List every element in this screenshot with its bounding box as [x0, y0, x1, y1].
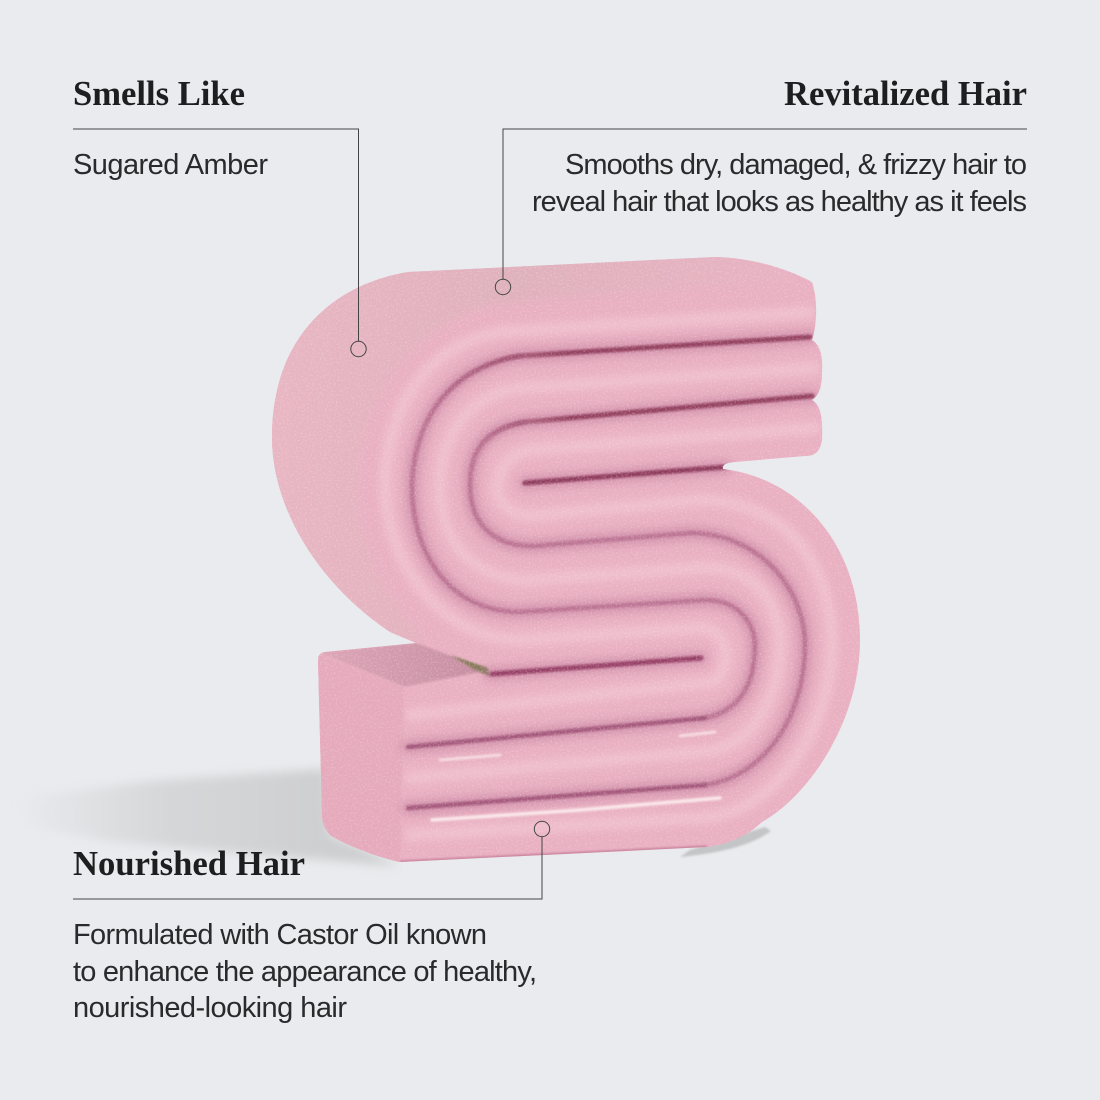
- leader line: [73, 129, 358, 341]
- callout: Revitalized Hair: [495, 74, 1027, 295]
- body text: Formulated with Castor Oil known: [73, 919, 487, 951]
- gloss highlights: [432, 732, 720, 820]
- floor shadow: [15, 769, 771, 866]
- callout: Nourished Hair: [73, 821, 550, 1024]
- product: pink S-shaped shampoo bar: [265, 250, 865, 866]
- infographic canvas: [72, 80, 1027, 1023]
- groove 3 upper centre: [525, 467, 725, 483]
- body text: [73, 919, 537, 1024]
- left side of lower block: [315, 652, 404, 866]
- body text: reveal hair that looks as healthy as it feels: [532, 186, 1027, 218]
- heading: Nourished Hair: [73, 844, 305, 883]
- body text: to enhance the appearance of healthy,: [73, 956, 537, 988]
- top of lower block: [318, 643, 490, 687]
- groove 2 bottom straight: [408, 785, 705, 808]
- groove 2 curved part: [470, 422, 805, 785]
- groove 4 lower centre: [492, 658, 701, 674]
- body text: [532, 149, 1027, 218]
- heading: Revitalized Hair: [784, 74, 1027, 113]
- product silhouette: [272, 257, 860, 862]
- leader line: [503, 129, 1027, 279]
- groove 1 bottom straight: [408, 718, 705, 747]
- speckled texture: [270, 255, 865, 865]
- soft groove shading: [408, 337, 812, 808]
- tube highlights: [385, 312, 832, 835]
- groove 2 top straight: [482, 392, 816, 448]
- leader line: [73, 837, 542, 899]
- anchor dot: [351, 341, 366, 357]
- groove 1 curved part: [412, 356, 755, 718]
- groove 1 top straight: [444, 333, 813, 398]
- heading: Smells Like: [73, 74, 245, 113]
- body text: nourished-looking hair: [73, 992, 347, 1024]
- bottom edge shade: [400, 847, 707, 862]
- body text: Sugared Amber: [73, 149, 268, 181]
- side surface of upper curve: [265, 250, 812, 640]
- callout: Smells Like: [73, 74, 366, 357]
- anchor dot: [495, 279, 511, 295]
- body text: Smooths dry, damaged, & frizzy hair to: [565, 149, 1027, 181]
- anchor dot: [534, 821, 550, 837]
- olive shadow wedge: [450, 655, 490, 677]
